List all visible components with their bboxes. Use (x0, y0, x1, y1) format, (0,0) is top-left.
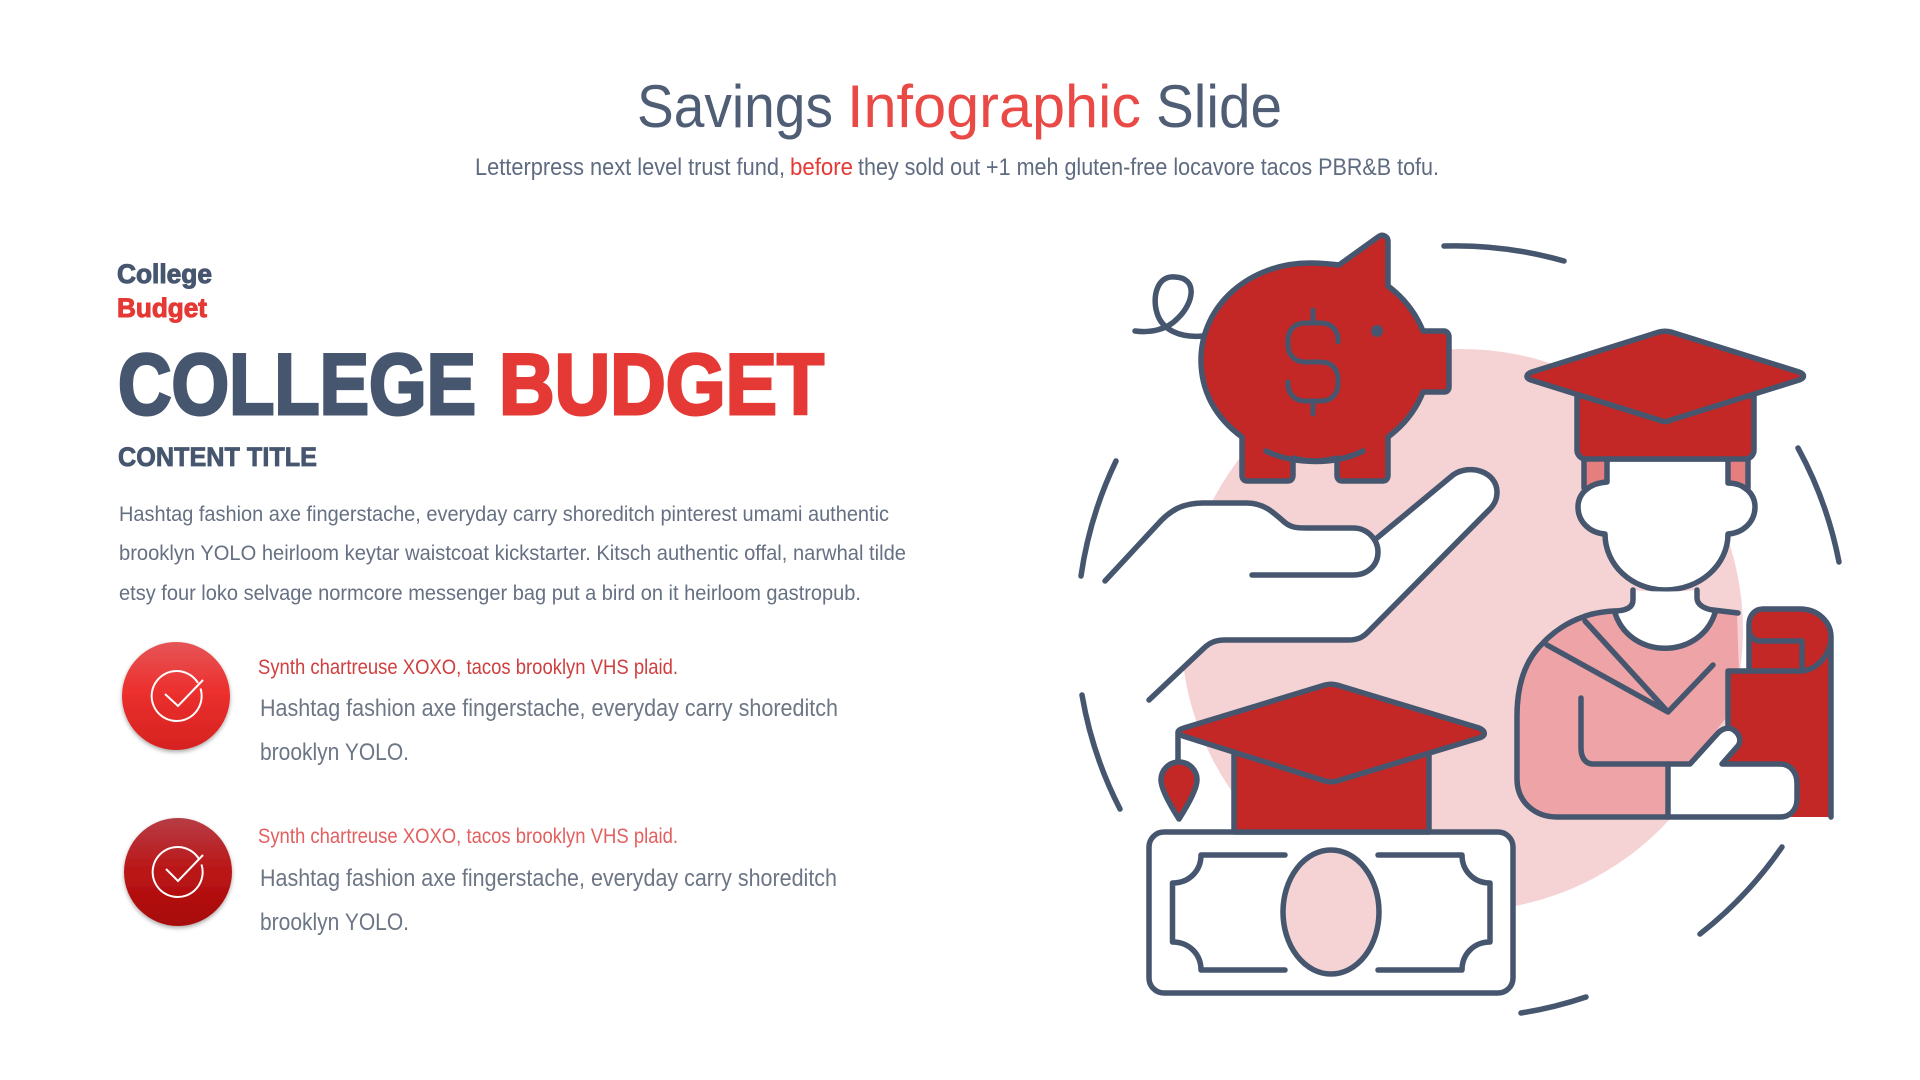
scroll (1728, 609, 1831, 817)
small heading: College Budget: College (117, 259, 212, 289)
list item 2 text: Synth chartreuse XOXO, tacos brooklyn VHS plaid. (258, 825, 678, 848)
holding arm (1668, 728, 1797, 817)
body paragraph: Hashtag fashion axe fingerstache, everyday carry shoreditch pinterest umami authentic (119, 503, 889, 526)
dashed outer ring (1081, 246, 1839, 1013)
icon: piggy bank (1135, 235, 1449, 481)
subtitle: before (790, 154, 853, 181)
neck (1615, 590, 1715, 648)
title: Savings (637, 73, 833, 140)
icon: red check badge (122, 642, 230, 750)
small heading: College Budget: Budget (117, 293, 207, 323)
student gown (1517, 609, 1740, 817)
subtitle: they sold out +1 meh gluten-free locavore tacos PBR&B tofu. (858, 154, 1439, 181)
subtitle (475, 154, 1439, 181)
list item 2 text: brooklyn YOLO. (260, 909, 409, 936)
list item 1 text: Hashtag fashion axe fingerstache, everyday carry shoreditch (260, 695, 838, 722)
list item 1 text: Synth chartreuse XOXO, tacos brooklyn VHS plaid. (258, 656, 678, 679)
main heading: COLLEGE BUDGET (118, 337, 824, 433)
body paragraph: brooklyn YOLO heirloom keytar waistcoat kickstarter. Kitsch authentic offal, narwhal tilde (119, 542, 906, 565)
gown lapels (1547, 621, 1713, 712)
list item 2 text (258, 825, 837, 936)
icon: dollar bill (1149, 832, 1513, 993)
list item 1 text: brooklyn YOLO. (260, 739, 409, 766)
icon: mortarboard on bill (1161, 684, 1484, 832)
small heading: College Budget (117, 259, 212, 323)
title: Infographic (847, 73, 1141, 140)
main heading: COLLEGE BUDGET: BUDGET (499, 337, 824, 433)
hair (1584, 459, 1748, 490)
list item 1 text (258, 656, 838, 766)
main heading: COLLEGE BUDGET: COLLEGE (118, 337, 476, 433)
list item 2 text: Hashtag fashion axe fingerstache, everyday carry shoreditch (260, 865, 837, 892)
student face and ears (1578, 459, 1755, 590)
content title: CONTENT TITLE (118, 442, 317, 472)
icon: open hand (1105, 470, 1497, 700)
subtitle: Letterpress next level trust fund, (475, 154, 785, 181)
icon: graduation student (1517, 331, 1831, 817)
student cap board (1527, 331, 1804, 422)
student cap base (1577, 396, 1754, 459)
pink background circle (1181, 349, 1743, 911)
title: Slide (1156, 73, 1282, 140)
body paragraph (119, 503, 906, 605)
body paragraph: etsy four loko selvage normcore messenger bag put a bird on it heirloom gastropub. (119, 582, 861, 605)
title (637, 73, 1282, 140)
icon: dark red check badge (124, 818, 232, 926)
